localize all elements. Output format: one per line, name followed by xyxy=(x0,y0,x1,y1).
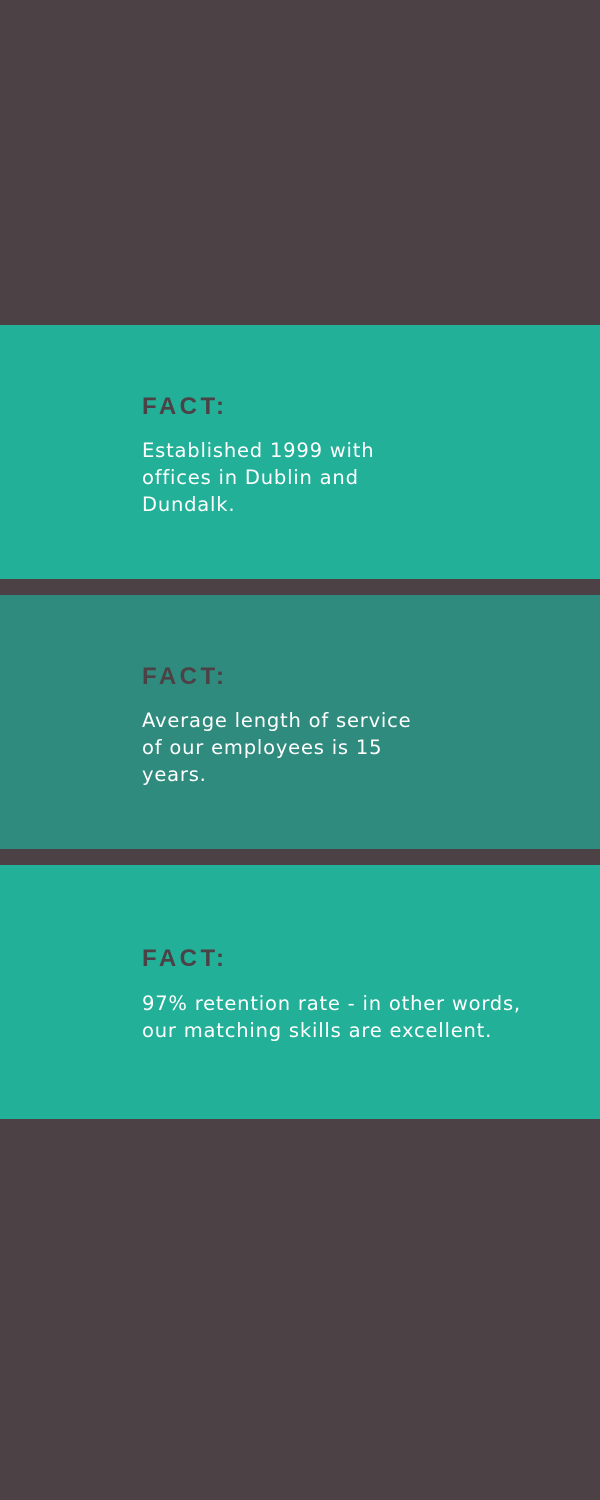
panel: fact 2 xyxy=(0,595,600,849)
text: fact 1: Established 1999 with offices in Dublin and Dundalk. xyxy=(142,439,374,516)
text: fact 3: 97% retention rate - in other words, our matching skills are excellent. xyxy=(142,992,521,1042)
text: fact 2: Average length of service of our employees is 15 years. xyxy=(142,709,411,786)
panel: fact 1 xyxy=(0,325,600,579)
panel: fact 3 xyxy=(0,865,600,1119)
heading: fact 3: FACT: xyxy=(142,945,228,972)
heading: fact 1: FACT: xyxy=(142,393,228,420)
heading: fact 2: FACT: xyxy=(142,663,228,690)
